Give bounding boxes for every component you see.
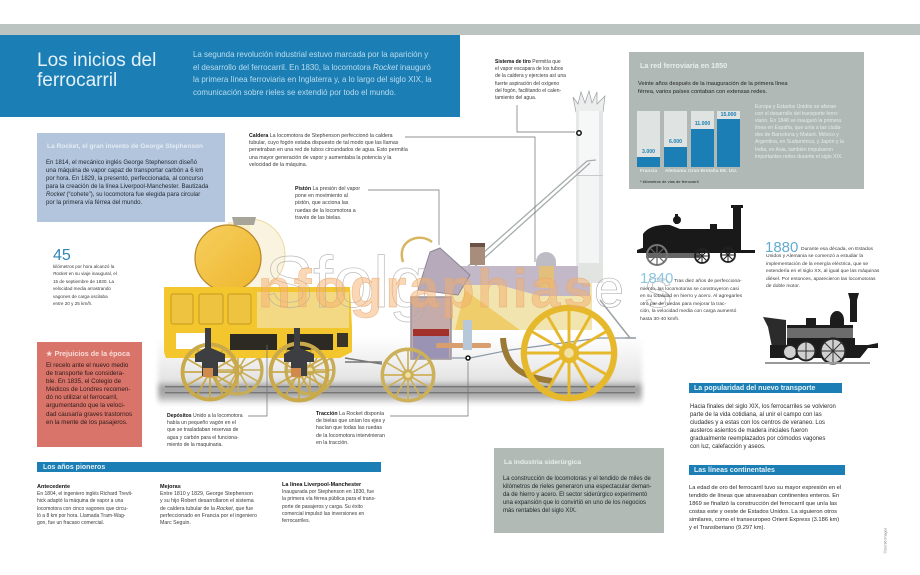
- callout: Sistema de tiro: [495, 59, 566, 101]
- callout: Pistón: ruedas de la locomotora a: [295, 208, 356, 214]
- watermark: es: [594, 259, 672, 319]
- panel text: da de hierro y acero. El sector siderúrgico experimentó: [503, 492, 647, 498]
- panel text: dó no utilizar el ferrocarril,: [46, 394, 118, 401]
- text: popularidad: austeros asientos de madera iniciales fueron: [690, 428, 808, 434]
- bar: Francia: 3.000: [642, 149, 655, 155]
- watermark: nfographias: [258, 259, 593, 319]
- text: popularidad: con luz, calefacción y aseos.: [690, 444, 766, 450]
- intro text: comunicación sobre rieles se extendió por todo el mundo.: [193, 88, 396, 97]
- section: Las líneas continentales: Las líneas continentales: [694, 467, 775, 474]
- column: Mejoras: de caldera tubular de la Rocket, que fue: [160, 506, 253, 512]
- frame struts: [600, 300, 636, 338]
- column: La línea Liverpool-Manchester: Inaugurada por Stephenson en 1830, fue: [282, 489, 374, 495]
- panel text: En 1814, el mecánico inglés George Stephenson diseñó: [46, 160, 197, 166]
- section: Los años pioneros: [37, 462, 381, 472]
- side text: India, en Asia, también impulsaron: [755, 147, 833, 153]
- side text: línea en España, que unía a las ciuda-: [755, 125, 842, 131]
- panel text: para la creación de la línea Liverpool-Manchester. Bautizada: [46, 184, 208, 190]
- stat text: hasta 30-40 km/h.: [640, 316, 680, 322]
- callout: Sistema de tiro: fuerte aspiración del oxígeno: [495, 81, 559, 87]
- stat text: implementación de la energía eléctrica, que se: [766, 262, 868, 267]
- stat text: miento, las locomotoras se construyeron casi: [640, 286, 739, 292]
- stat number: 1840: [640, 270, 673, 287]
- side text: Argentina, en Sudamérica, y Japón y la: [755, 139, 844, 145]
- panel intro: Veinte años después de la inauguración de la primera línea: [638, 81, 788, 87]
- column: Antecedente: Antecedente: [37, 484, 70, 490]
- callout: Caldera: Caldera La locomotora de Stephenson perfeccionó la caldera: [249, 133, 393, 139]
- panel text: por la primera vía férrea del mundo.: [46, 200, 142, 206]
- gold ring pipe: [402, 238, 432, 262]
- callout: Caldera: una mayor generación de vapor y aumentaba la potencia y la: [249, 155, 391, 161]
- text: líneas continentales: y el Transiberiano (9.297 km).: [689, 525, 765, 531]
- column: Mejoras: Marc Seguin.: [160, 520, 191, 526]
- chimney: [573, 91, 605, 278]
- column: Antecedente: En 1804, el ingeniero inglés Richard Trevit-: [37, 491, 133, 497]
- bar: EE. UU.: [717, 111, 740, 174]
- text: líneas continentales: La edad de oro del ferrocarril tuvo su mayor expresión en el: [689, 485, 841, 491]
- header panel: [0, 35, 460, 117]
- panel text: ble. En 1835, el Colegio de: [46, 378, 121, 385]
- side text: viario. En 1848 se inauguró la primera: [755, 118, 841, 124]
- panel intro: [638, 81, 788, 95]
- column: Mejoras: Mejoras: [160, 484, 181, 490]
- stat text: Rocket en su viaje inaugural, el: [53, 271, 117, 276]
- engraving: 1840 locomotive: [637, 205, 755, 265]
- panel text: más rentables del siglo XIX.: [503, 508, 577, 514]
- top grey band: [0, 24, 920, 35]
- text: líneas continentales: tendido de líneas que atravesaban continentes enteros. En: [689, 493, 839, 499]
- bar: Gran Bretaña: [688, 111, 718, 174]
- column: La línea Liverpool-Manchester: La línea Liverpool-Manchester: [282, 482, 361, 488]
- bar: EE. UU.: 15.000: [721, 112, 736, 118]
- driving wheel: [524, 308, 614, 398]
- column: La línea Liverpool-Manchester: ferrocarriles.: [282, 518, 310, 524]
- callout: Caldera: penetraban en una red de tubos circundados de agua. Esto permitía: [249, 147, 408, 153]
- bar: Gran Bretaña: Gran Bretaña: [688, 169, 718, 174]
- callout: Sistema de tiro: tamiento del agua.: [495, 95, 536, 101]
- ground and gravel: [158, 335, 642, 405]
- column: Antecedente: gon, fue un fracaso comercial.: [37, 520, 104, 526]
- callout: Depósitos: había un pequeño vagón en el: [167, 420, 236, 426]
- panel heading: La red ferroviaria en 1850: [640, 61, 727, 70]
- callout: Depósitos: agua y carbón para el funciona-: [167, 435, 239, 441]
- callout: Caldera: [249, 133, 408, 168]
- callout: Tracción: hacían que todas las ruedas: [316, 425, 382, 431]
- panel: red ferroviaria: [629, 52, 864, 189]
- bar: EE. UU.: EE. UU.: [720, 169, 737, 174]
- callout: Tracción: Tracción La Rocket disponía: [316, 411, 384, 417]
- callout: Pistón: pone en movimiento al: [295, 193, 348, 199]
- stat text: [766, 246, 880, 289]
- panel text: por hora. En 1829, la presentó, perfeccionada, al concurso: [46, 176, 203, 182]
- callout: Depósitos: miento de la maquinaria.: [167, 442, 223, 448]
- front tender wheels: [183, 344, 327, 400]
- callout markers: [466, 131, 581, 360]
- intro text: [193, 50, 432, 97]
- callout: Sistema de tiro: el vapor escapara de los tubos: [495, 66, 563, 72]
- callout: Pistón: Pistón La presión del vapor: [295, 186, 360, 192]
- callout: Depósitos: [167, 413, 243, 448]
- watermark: [258, 243, 672, 323]
- side text: con el desarrollo del transporte ferro-: [755, 111, 839, 117]
- panel text: argumentando que la veloci-: [46, 402, 125, 409]
- stay rod: [466, 160, 596, 271]
- text: líneas continentales: 1869 se finalizó la construcción del ferrocarril que unía las: [689, 501, 837, 507]
- panel: Prejuicios: [37, 342, 142, 447]
- panel heading: La Rocket, el gran invento de George Stephenson: [47, 143, 203, 150]
- firebox: [411, 297, 451, 359]
- slanted cylinder: [418, 248, 470, 295]
- watermark: Sfolg: [265, 243, 429, 323]
- intro text: la primera línea ferroviaria en Inglaterra y, a lo largo del siglo XIX, la: [193, 75, 432, 84]
- bar: Alemania: 6.000: [669, 139, 682, 145]
- panel intro: férrea, varios países contaban con extensas redes.: [638, 89, 767, 95]
- stat text: extendería en el siglo XX, al igual que las máquinas: [766, 269, 879, 274]
- panel text: El recelo ante el nuevo medio: [46, 362, 128, 369]
- stat text: vagones de carga oscilaba: [53, 294, 108, 299]
- panel text: Médicos de Londres recomen-: [46, 386, 130, 393]
- panel text: [503, 476, 652, 514]
- panel text: dad causaría graves trastornos: [46, 411, 132, 418]
- panel: La industria siderúrgica: [494, 448, 664, 533]
- callout lines: [248, 105, 575, 416]
- side text: Europa y Estados Unidos se afanan: [755, 104, 836, 110]
- rear driving wheel: [503, 338, 552, 381]
- intro text: La segunda revolución industrial estuvo marcada por la aparición y: [193, 50, 428, 59]
- column: La línea Liverpool-Manchester: comercial impulsó las inversiones en: [282, 511, 364, 517]
- column: Mejoras: [160, 484, 257, 526]
- column: Antecedente: [37, 484, 133, 526]
- piston rod: [436, 320, 635, 358]
- 1880 stat: [765, 239, 880, 289]
- section: La popularidad del nuevo transporte: [689, 383, 842, 393]
- column: Antecedente: hick adaptó la máquina de vapor a una: [37, 498, 123, 504]
- column: La línea Liverpool-Manchester: la primera vía férrea pública para el trans-: [282, 496, 376, 502]
- column: Antecedente: locomotora con cinco vagones que circu-: [37, 506, 128, 512]
- panel text: una expansión que lo convirtió en uno de los negocios: [503, 500, 646, 506]
- column: Mejoras: y su hijo Robert desarrollaron el sistema: [160, 498, 254, 504]
- callout: Sistema de tiro: de la caldera y ejerciera así una: [495, 73, 566, 79]
- stat text: 15 de septiembre de 1830. La: [53, 279, 114, 284]
- side text: des de Barcelona y Mataró. México y: [755, 132, 839, 138]
- bar chart: [637, 111, 740, 174]
- stat text: entre 20 y 25 km/h.: [53, 301, 92, 306]
- chart footnote: * kilómetros de vías de ferrocarril: [640, 179, 698, 184]
- text: líneas continentales: similares, como el transeuropeo Orient Express (3.186 km): [689, 517, 839, 523]
- bar: Alemania: [664, 111, 687, 174]
- panel text: [46, 362, 132, 426]
- side text: [755, 104, 844, 160]
- callout: Tracción: en la tracción.: [316, 440, 349, 446]
- boiler body: [450, 243, 603, 330]
- column: Antecedente: ló a 8 km por hora. Llamada Tram-Wag-: [37, 513, 125, 519]
- tender wagon: [164, 287, 352, 358]
- callout: Tracción: de la locomotora intervinieran: [316, 433, 385, 439]
- stat text: Tras diez años de perfecciona-: [674, 279, 742, 284]
- stat text: diésel. Por entonces, aparecieron las locomotoras: [766, 277, 876, 282]
- column: La línea Liverpool-Manchester: [282, 482, 376, 524]
- stat text: en su totalidad en hierro y acero. Al agregarles: [640, 294, 742, 299]
- text: popularidad: gradualmente reemplazados por cómodos vagones: [690, 436, 825, 442]
- panel text: en la mente de los pasajeros.: [46, 419, 128, 426]
- callout: Tracción: de bielas que unían los ejes y: [316, 418, 385, 424]
- panel heading: La industria siderúrgica: [504, 459, 581, 466]
- column: Mejoras: Entre 1810 y 1829, George Stephenson: [160, 491, 253, 497]
- callout: Caldera: tubular, cuyo fogón estaba dispuesto de tal modo que las llamas: [249, 140, 398, 146]
- stat number: 1880: [765, 239, 798, 256]
- stat text: de doble motor.: [766, 284, 800, 289]
- bar: Gran Bretaña: 11.000: [695, 121, 710, 127]
- panel: La Rocket: [37, 133, 225, 222]
- callout: Sistema de tiro: Sistema de tiro Permitía que: [495, 59, 561, 65]
- side text: importantes redes durante el siglo XIX.: [755, 154, 843, 160]
- stat text: otro par de ruedas para mejorar la trac-: [640, 302, 726, 306]
- text: líneas continentales: costas este y oeste de Estados Unidos. La siguieron otros: [689, 509, 837, 515]
- panel text: Rocket (“cohete”), su locomotora fue elegida para circular: [46, 192, 200, 198]
- title: ferrocarril: [37, 70, 117, 91]
- text: popularidad: ciudades y a estas con los centros de veraneo. Los: [690, 420, 825, 426]
- title: [37, 50, 156, 91]
- panel heading: ★ Prejuicios de la época: [46, 349, 130, 358]
- stat text: kilómetros por hora alcanzó la: [53, 264, 114, 269]
- title: Los inicios del: [37, 50, 156, 71]
- section: Las líneas continentales: [689, 465, 845, 475]
- water barrel: [195, 217, 285, 291]
- stat text: ción, la velocidad media con carga aumentó: [640, 309, 736, 314]
- stat text: [53, 264, 117, 306]
- text: popularidad: parte de la vida cotidiana, al unir el campo con las: [690, 412, 822, 418]
- text: popularidad: Hacia finales del siglo XIX, los ferrocarriles se volvieron: [690, 404, 836, 410]
- stat text: velocidad media arrastrando: [53, 286, 111, 291]
- intro text: el desarrollo del ferrocarril. En 1830, la locomotora Rocket inauguró: [193, 63, 431, 72]
- callout: Caldera: velocidad de la máquina.: [249, 162, 307, 168]
- small leading wheel: [382, 349, 434, 401]
- column: La línea Liverpool-Manchester: porte de pasajeros y carga. Su éxito: [282, 504, 363, 510]
- text: líneas continentales: [689, 485, 841, 531]
- stat text: [640, 278, 742, 322]
- bar: Francia: [637, 111, 660, 174]
- 1840 stat: [640, 270, 742, 322]
- stat number: 45: [53, 247, 71, 264]
- panel text: de transporte fue considera-: [46, 370, 124, 377]
- axle boxes: [195, 328, 314, 377]
- 45 stat: [53, 247, 117, 306]
- column: Mejoras: perfeccionado en Francia por el ingeniero: [160, 513, 257, 519]
- stat text: Unidos y Alemania se comenzó a estudiar la: [766, 254, 863, 259]
- callout: Pistón: [295, 186, 360, 221]
- bar: Alemania: Alemania: [665, 169, 686, 174]
- engraving: 1880 locomotive: [763, 293, 878, 364]
- panel text: [46, 160, 208, 206]
- callout: Pistón: través de las bielas.: [295, 215, 341, 221]
- rear tender wheels: [214, 346, 334, 394]
- coupling: [345, 358, 382, 364]
- callout: Sistema de tiro: del fogón, facilitando el calen-: [495, 88, 561, 94]
- panel text: La construcción de locomotoras y el tendido de miles de: [503, 476, 651, 482]
- panel text: una máquina de vapor capaz de transportar carbón a 6 km: [46, 168, 203, 174]
- bar: Francia: Francia: [640, 169, 657, 174]
- section: Los años pioneros: Los años pioneros: [43, 464, 105, 471]
- credit: ©Sol 90 Images: [884, 528, 888, 553]
- callout: Depósitos: Depósitos Unido a la locomotora: [167, 413, 243, 419]
- callout: Pistón: pistón, que acciona las: [295, 200, 348, 206]
- callout: Tracción: [316, 411, 386, 446]
- stat text: Durante esa década, en Estados: [801, 247, 873, 252]
- panel text: kilómetros de rieles generaron una espectacular deman-: [503, 484, 652, 490]
- section: La popularidad del nuevo transporte: La popularidad del nuevo transporte: [694, 385, 815, 392]
- callout: Depósitos: que se trasladaban reservas de: [167, 427, 238, 433]
- text: popularidad: [690, 404, 836, 450]
